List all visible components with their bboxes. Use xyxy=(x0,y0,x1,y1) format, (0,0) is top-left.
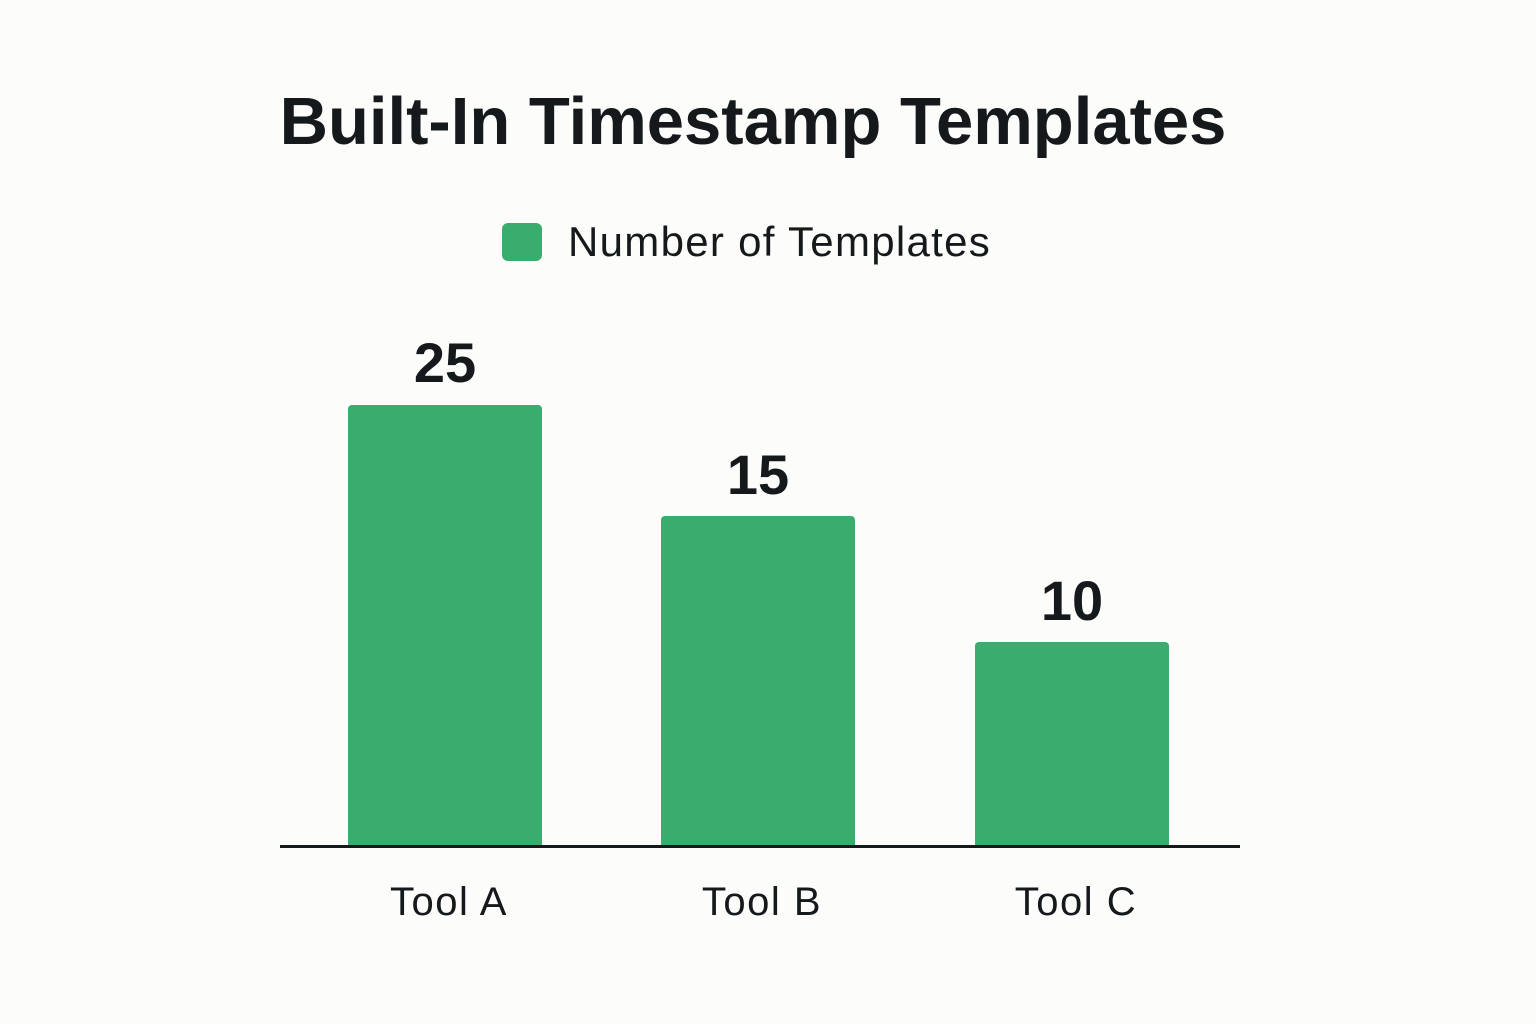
value: Tool B: 15 xyxy=(727,443,789,506)
x axis xyxy=(280,845,1240,848)
bar chart xyxy=(280,331,1240,848)
label: Tool C: Tool C xyxy=(1015,880,1137,924)
bar: Tool B xyxy=(661,516,855,847)
label: Tool B: Tool B xyxy=(702,880,822,924)
value: Tool C: 10 xyxy=(1041,569,1103,632)
bar: Tool A xyxy=(348,405,542,847)
bar: Tool C xyxy=(975,642,1169,847)
legend label: Number of Templates xyxy=(568,218,991,265)
value: Tool A: 25 xyxy=(414,331,476,394)
legend xyxy=(502,218,991,265)
label: Tool A: Tool A xyxy=(390,880,508,924)
legend swatch xyxy=(502,223,542,261)
title: Built-In Timestamp Templates xyxy=(280,84,1226,159)
